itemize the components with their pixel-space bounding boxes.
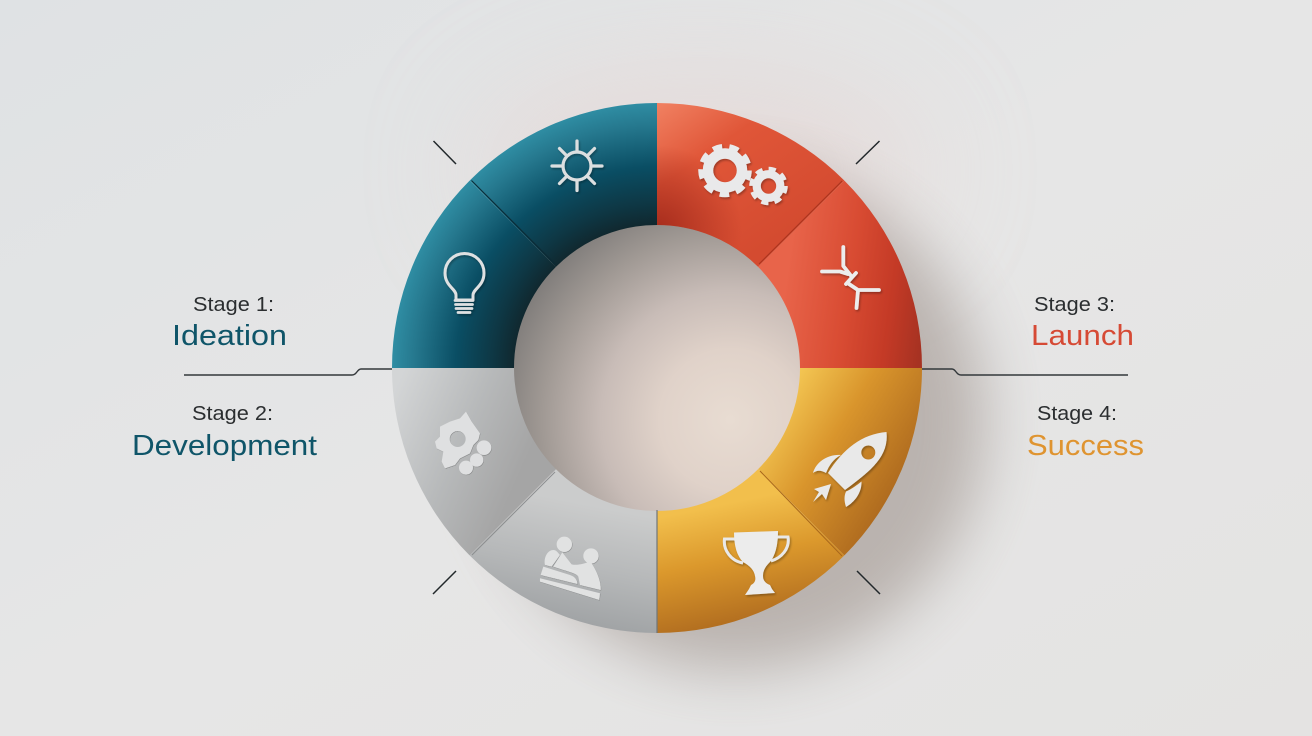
tick mark: top left	[434, 141, 456, 164]
tick mark: bottom right	[857, 571, 880, 594]
label: stage 2: Development	[132, 430, 317, 462]
label: stage 2: Stage 2:	[192, 403, 273, 425]
label: stage 4: Stage 4:	[1037, 403, 1117, 425]
label: stage 1	[172, 294, 287, 352]
segment: ideation upper	[470, 103, 657, 267]
icon: gears	[701, 146, 786, 203]
segment divider lines	[472, 180, 842, 633]
donut ring	[392, 103, 922, 633]
tick mark: bottom left	[433, 571, 456, 594]
icon: sun	[552, 141, 602, 190]
icon: light bulb	[445, 254, 484, 312]
inner hole	[509, 220, 805, 516]
label: stage 3	[1031, 294, 1134, 352]
tick mark: top right	[856, 141, 880, 164]
icon: branching connector	[822, 247, 879, 308]
label: stage 2	[132, 403, 317, 462]
label: stage 4	[1027, 403, 1144, 462]
label: stage 4: Success	[1027, 430, 1144, 462]
segment: launch lower	[758, 181, 922, 368]
connector line: left	[184, 369, 392, 375]
connector line: right	[922, 369, 1128, 375]
icon: people on platform	[540, 537, 601, 600]
segment: success lower	[657, 469, 844, 633]
icon: rocket	[813, 432, 887, 507]
label: stage 3: Stage 3:	[1034, 294, 1115, 316]
label: stage 3: Launch	[1031, 320, 1134, 352]
segment: launch upper	[657, 103, 844, 267]
icon: gear with dots	[435, 412, 491, 475]
segment: development upper	[392, 368, 556, 555]
segment: development lower	[470, 469, 657, 633]
ring soft shadow	[480, 80, 985, 670]
label: stage 1: Stage 1:	[193, 294, 274, 316]
label: stage 1: Ideation	[172, 320, 287, 352]
segment: ideation lower	[392, 181, 556, 368]
segment: success upper	[758, 368, 922, 555]
icon: trophy	[724, 531, 788, 595]
